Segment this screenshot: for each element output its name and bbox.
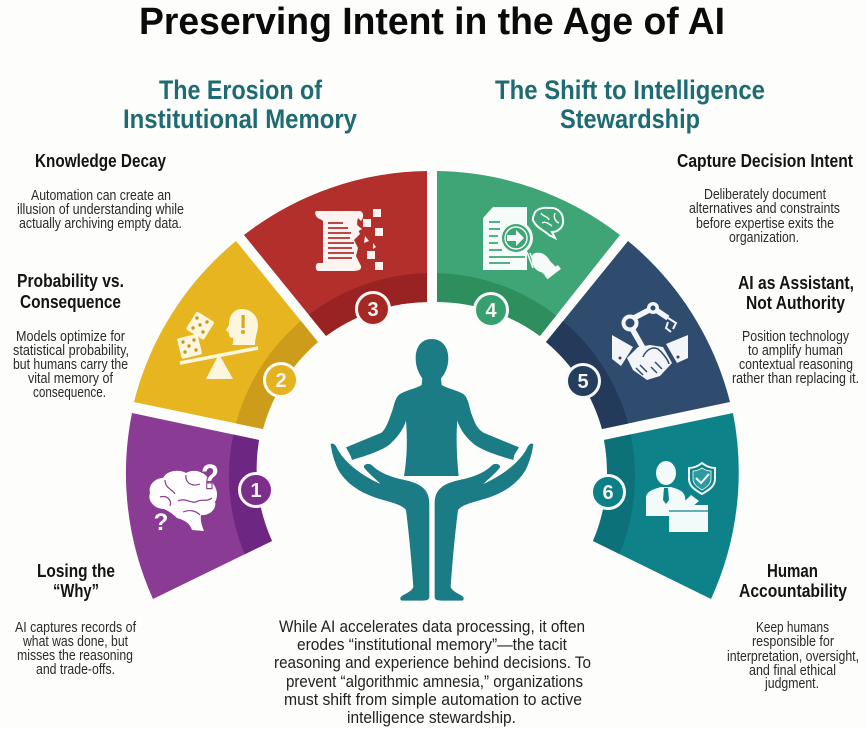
text block: central summary: reasoning and experience behind decisions. To: [274, 653, 591, 672]
heading: the shift to intelligence stewardship: Stewardship: [560, 104, 700, 134]
question mark large: ?: [201, 458, 219, 496]
badge 5: 5: [577, 371, 589, 393]
text block: losing the why: “Why”: [53, 580, 99, 601]
icon: dice on scale with head: [177, 309, 258, 379]
text block: central summary: [274, 617, 591, 727]
segment shape 2: [134, 241, 318, 429]
panel: segment 6 human accountability: [593, 413, 739, 599]
panel: segment 4 capture decision intent: [437, 171, 620, 336]
text block: probability vs. consequence: Probability vs.: [17, 270, 124, 291]
segment shape 4: [437, 171, 620, 336]
text block: knowledge decay: actually archiving empty data.: [19, 215, 182, 232]
text block: probability vs. consequence: Models optimize for: [16, 328, 125, 345]
text block: losing the why: [15, 560, 137, 678]
text block: losing the why: AI captures records of: [15, 619, 137, 636]
text block: losing the why: Losing the: [37, 560, 115, 581]
text block: human accountability: Human: [767, 560, 818, 581]
panel: segment 1 losing the why: [126, 413, 272, 599]
icon: document with magnifier, brain and hand: [483, 207, 563, 279]
badge 3: 3: [367, 299, 379, 321]
question mark small: ?: [154, 509, 168, 536]
inner band 4: [437, 273, 556, 336]
text block: losing the why: what was done, but: [22, 633, 129, 650]
text block: probability vs. consequence: [13, 270, 129, 401]
text block: probability vs. consequence: statistical probability,: [13, 342, 129, 359]
badge 6: 6: [602, 482, 614, 504]
panel: segment 5 ai as assistant: [546, 241, 730, 429]
text block: capture decision intent: Deliberately document: [704, 186, 827, 203]
text block: knowledge decay: Automation can create an: [31, 187, 171, 204]
badge 2: [264, 364, 298, 396]
text block: human accountability: responsible for: [752, 633, 834, 650]
segment shape 6: [593, 413, 739, 599]
central figure held by hands: [331, 339, 533, 601]
icon: decaying scroll: [315, 209, 383, 271]
heading: the erosion of institutional memory: Institutional Memory: [123, 104, 357, 134]
text block: central summary: intelligence stewardship.: [347, 708, 516, 727]
text block: capture decision intent: before expertise exits the: [696, 215, 834, 232]
inner band 6: [593, 434, 635, 554]
text block: capture decision intent: organization.: [729, 229, 799, 246]
heading: the shift to intelligence stewardship: The Shift to Intelligence: [495, 75, 765, 105]
text block: probability vs. consequence: but humans carry the: [13, 356, 128, 373]
inner band 5: [546, 321, 628, 429]
title: Preserving Intent in the Age of AI: [139, 1, 725, 43]
badge 2: 2: [275, 370, 287, 392]
badge 6: [592, 476, 624, 508]
inner band 2: [236, 321, 318, 429]
text block: human accountability: Accountability: [739, 580, 848, 601]
left hand and leg: [331, 443, 429, 601]
text block: capture decision intent: [677, 150, 853, 246]
figure body: [346, 339, 519, 476]
text block: losing the why: and trade-offs.: [36, 661, 115, 678]
panel: segment 3 knowledge decay: [244, 171, 427, 336]
text block: ai as assistant, not authority: to amplify human: [748, 342, 843, 359]
heading: the shift to intelligence stewardship: [495, 75, 765, 134]
text block: central summary: prevent “algorithmic amnesia,” organizations: [286, 672, 583, 691]
text block: ai as assistant, not authority: Not Authority: [746, 292, 846, 313]
text block: human accountability: and final ethical: [749, 662, 836, 679]
badge 3: [356, 292, 390, 326]
badge 1: 1: [250, 480, 262, 502]
icon: person, ballot box and shield: [646, 461, 715, 532]
text block: central summary: While AI accelerates data processing, it often: [279, 617, 585, 636]
text block: losing the why: misses the reasoning: [17, 647, 133, 664]
heading: the erosion of institutional memory: [123, 75, 357, 134]
text block: central summary: must shift from simple automation to active: [284, 690, 582, 709]
text block: knowledge decay: [17, 150, 184, 232]
panel: segment 2 probability vs consequence: [134, 241, 318, 429]
text block: central summary: erodes “institutional memory”—the tacit: [297, 635, 567, 654]
text block: human accountability: [727, 560, 859, 692]
text block: probability vs. consequence: vital memory of: [28, 370, 114, 387]
text block: human accountability: judgment.: [764, 675, 819, 692]
right hand and leg: [435, 443, 533, 601]
text block: ai as assistant, not authority: [732, 272, 859, 387]
segment shape 1: [126, 413, 272, 599]
badge 1: [240, 474, 272, 506]
inner band 1: [229, 434, 272, 554]
segment shape 3: [244, 171, 427, 336]
segment shape 5: [546, 241, 730, 429]
text block: knowledge decay: Knowledge Decay: [35, 150, 167, 171]
text block: probability vs. consequence: Consequence: [20, 291, 121, 312]
text block: capture decision intent: alternatives and constraints: [689, 200, 840, 217]
heading: the erosion of institutional memory: The Erosion of: [159, 75, 322, 105]
badge 4: [474, 294, 508, 326]
icon: robot arm and handshake: [612, 302, 688, 380]
text block: knowledge decay: illusion of understanding while: [17, 201, 184, 218]
inner band 3: [308, 273, 427, 336]
badge 4: 4: [485, 300, 497, 322]
text block: human accountability: Keep humans: [756, 619, 829, 636]
text block: probability vs. consequence: consequence.: [33, 384, 106, 401]
icon: brain with question marks: [149, 458, 219, 536]
badge 5: [566, 364, 600, 398]
